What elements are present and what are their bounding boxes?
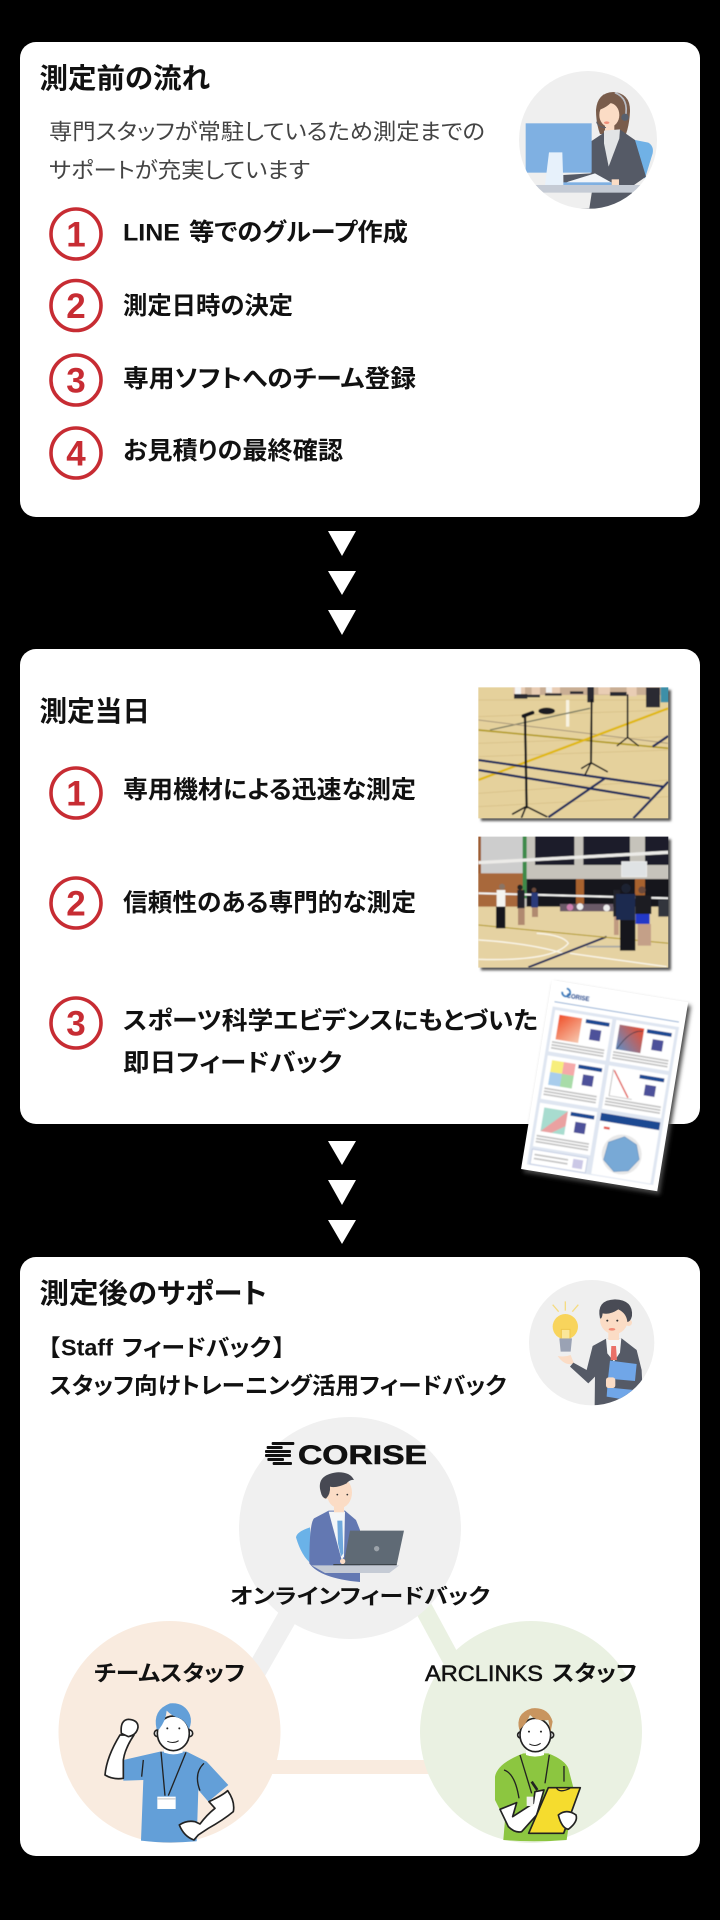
text block: staff support [49, 120, 485, 183]
chart card 3 [541, 1055, 605, 1108]
step 1: 1 [66, 774, 86, 814]
text block: staff feedback: Staff [61, 1334, 113, 1360]
arrows: first group [328, 531, 356, 635]
chart card 1 [548, 1010, 612, 1061]
chart card 4 [602, 1065, 668, 1118]
text block: staff support: サポートが充実しています [49, 158, 310, 183]
label: online feedback: オンラインフィードバック [230, 1586, 490, 1608]
icon: operator with headset [519, 71, 657, 210]
connector: gray [250, 1595, 300, 1682]
icon: team staff man [105, 1703, 234, 1842]
step 2 [51, 878, 416, 928]
chart card 2 [610, 1020, 676, 1071]
logo: CORISE [265, 1440, 427, 1470]
icon: man with lightbulb [529, 1280, 654, 1405]
step 1: 1 [66, 216, 86, 254]
step 4: 4 [66, 434, 86, 474]
note box [530, 1149, 588, 1173]
photo: volleyball court measurement [477, 835, 671, 970]
node: ARCLINKS staff [420, 1621, 642, 1843]
step 3: 3 [66, 1004, 86, 1044]
icon: man with laptop [296, 1472, 404, 1582]
radar chart panel [591, 1113, 660, 1184]
panel: after measurement support [20, 1257, 700, 1856]
step 2: 測定日時の決定 [123, 292, 293, 320]
node: CORISE online feedback [230, 1417, 490, 1639]
connector: green [418, 1598, 458, 1672]
panel: before measurement [20, 42, 700, 517]
label: ARCLINKS staff [425, 1661, 637, 1686]
step 3 [51, 998, 538, 1077]
step 1 [51, 209, 408, 259]
text block: staff feedback: スタッフ向けトレーニング活用フィードバック [50, 1372, 506, 1398]
step 1: 専用機材による迅速な測定 [123, 776, 416, 804]
step 1: LINE [123, 220, 180, 246]
photo: camera stands on gym floor [477, 686, 671, 821]
heading: measurement day: 測定当日 [40, 696, 150, 727]
label: ARCLINKS staff: スタッフ [552, 1661, 637, 1686]
step 2: 2 [66, 884, 86, 924]
chart card 5 [533, 1103, 597, 1155]
step 2 [51, 280, 293, 330]
text block: staff feedback: 】 [272, 1334, 285, 1360]
text block: staff feedback: 【 [48, 1334, 61, 1360]
text block: staff feedback: フィードバック [122, 1334, 271, 1360]
connector: orange [260, 1760, 440, 1774]
node: team staff [58, 1621, 280, 1843]
panel: measurement day [20, 649, 700, 1124]
label: team staff: チームスタッフ [94, 1661, 245, 1686]
icon: ARCLINKS staff man [495, 1708, 580, 1841]
step 3: スポーツ科学エビデンスにもとづいた [123, 1006, 538, 1035]
arrows: second group [328, 1141, 356, 1244]
step 3 [51, 355, 417, 405]
logo: CORISE: CORISE [298, 1440, 427, 1470]
text block: staff feedback [48, 1334, 506, 1398]
step 3: 即日フィードバック [123, 1049, 342, 1077]
feedback report sheet: CORISE [566, 994, 590, 1003]
step 2: 信頼性のある専門的な測定 [123, 889, 416, 917]
heading: before measurement: 測定前の流れ [40, 63, 210, 94]
step 4: お見積りの最終確認 [123, 437, 344, 465]
step 3: 3 [66, 362, 86, 400]
step 3: 専用ソフトへのチーム登録 [123, 365, 417, 393]
heading: after measurement support: 測定後のサポート [40, 1278, 267, 1309]
step 2: 2 [66, 287, 86, 326]
text block: staff support: 専門スタッフが常駐しているため測定までの [49, 120, 485, 144]
feedback report sheet [521, 980, 691, 1195]
step 1: 等でのグループ作成 [189, 218, 408, 246]
label: ARCLINKS staff: ARCLINKS [425, 1661, 543, 1686]
step 4 [51, 428, 344, 478]
step 1 [51, 768, 416, 818]
